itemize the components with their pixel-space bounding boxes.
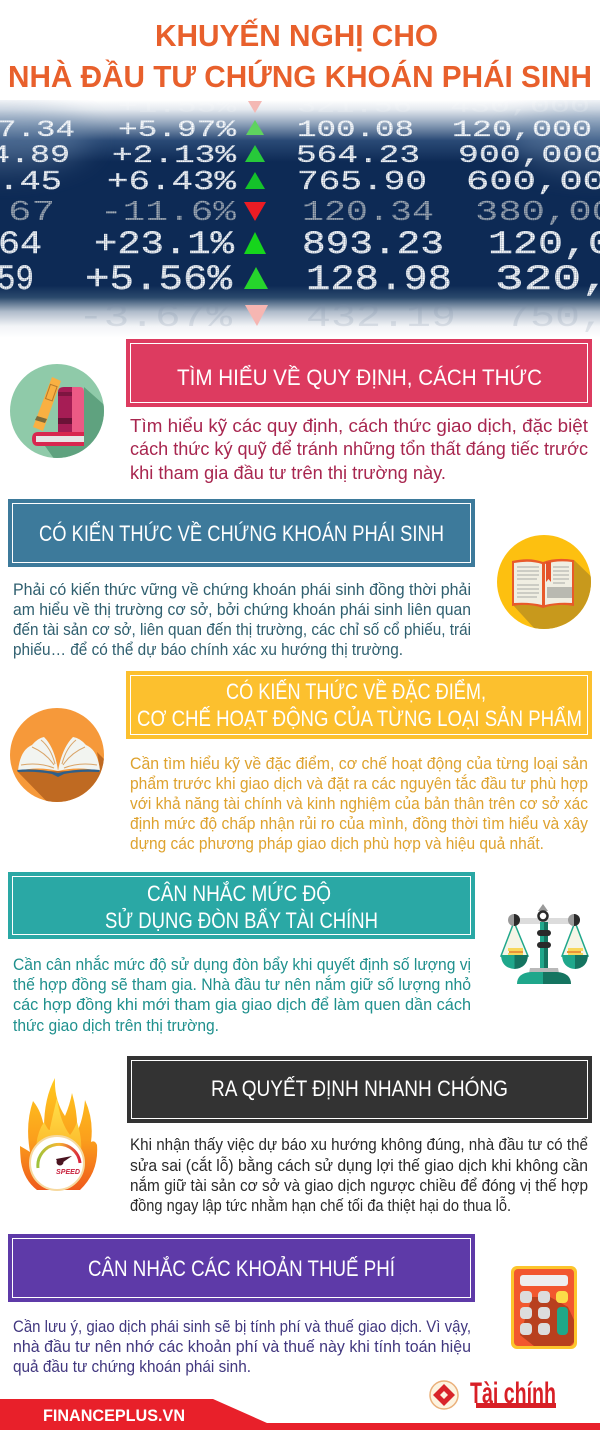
section 5: fast decisions: [20, 1056, 592, 1215]
heading: regulations: TÌM HIỂU VỀ QUY ĐỊNH, CÁCH THỨC: [177, 365, 542, 390]
stock ticker board photo: -3.67%: [78, 299, 233, 336]
body text: financial leverage: thức giao dịch trên thị trường.: [13, 1017, 219, 1035]
title: [8, 18, 592, 94]
heading: regulations: [126, 339, 592, 407]
heading: taxes and fees: [8, 1234, 475, 1302]
logo: Tài chính: Tài chính: [470, 1377, 556, 1410]
section 4: financial leverage: [8, 872, 588, 1035]
footer bar: [0, 1399, 600, 1430]
body text: regulations: Tìm hiểu kỹ các quy định, cách thức giao dịch, đặc biệt: [130, 416, 588, 436]
heading: derivatives knowledge: [8, 499, 475, 567]
stock ticker board photo: 100.08: [297, 117, 414, 143]
stock ticker board photo: +23.1%: [94, 226, 235, 263]
body text: derivatives knowledge: đến tài sản cơ sở, liên quan đến thị trường, các chỉ số cổ phiếu, trái: [13, 621, 471, 639]
icon: stack of books: [10, 364, 104, 458]
body text: product features: định mức độ chấp nhận rủi ro của mình, đồng thời tìm hiểu và xây: [130, 815, 589, 833]
stock ticker board photo: 893.23: [302, 226, 444, 263]
stock ticker board photo: 900,000: [458, 141, 600, 170]
heading: derivatives knowledge: CÓ KIẾN THỨC VỀ CHỨNG KHOÁN PHÁI SINH: [39, 521, 444, 546]
stock ticker board photo: 320,: [495, 260, 600, 300]
stock ticker board photo: +1.55%: [118, 96, 238, 119]
icon: flaming speedometer: SPEED: [56, 1169, 80, 1176]
stock ticker board photo: 380,00: [475, 196, 600, 229]
logo: Tài chính: [430, 1377, 556, 1410]
body text: regulations: [130, 416, 588, 483]
heading: fast decisions: RA QUYẾT ĐỊNH NHANH CHÓNG: [211, 1076, 508, 1101]
body text: fast decisions: [130, 1136, 588, 1215]
stock ticker board photo: 765.90: [297, 168, 427, 198]
body text: product features: Cần tìm hiểu kỹ về đặc điểm, cơ chế hoạt động của từng loại sản: [130, 755, 588, 773]
body text: derivatives knowledge: Phải có kiến thức vững về chứng khoán phái sinh đồng thời phải: [13, 581, 471, 599]
stock ticker board photo: 750,: [505, 299, 600, 336]
section 1: regulations: [10, 339, 592, 483]
heading: financial leverage: CÂN NHẮC MỨC ĐỘ: [147, 881, 331, 906]
body text: taxes and fees: Cần lưu ý, giao dịch phái sinh sẽ bị tính phí và thuế giao dịch. Vì vậy,: [13, 1318, 471, 1336]
body text: fast decisions: đồng ngay lập tức nhằm hạn chế tối đa thiệt hại do thua lỗ.: [130, 1196, 511, 1215]
icon: flaming speedometer: [20, 1078, 97, 1190]
body text: derivatives knowledge: phiếu… để có thể dự báo chính xác xu hướng thị trường.: [13, 641, 403, 659]
body text: regulations: cách thức ký quỹ để tránh những tổn thất đáng tiếc trước: [130, 439, 588, 459]
stock ticker board photo: [0, 96, 600, 338]
heading: product features: [126, 671, 592, 739]
stock ticker board photo: 432.19: [306, 299, 456, 336]
body text: taxes and fees: [13, 1318, 471, 1376]
section 2: derivatives knowledge: [8, 499, 600, 659]
body text: regulations: khi tham gia đầu tư trên thị trường này.: [130, 463, 446, 483]
stock ticker board photo: +2.13%: [112, 141, 237, 170]
stock ticker board photo: +5.97%: [118, 117, 236, 143]
body text: fast decisions: sửa sai (cắt lỗ) bằng cách sử dụng lợi thế giao dịch khi không cần: [130, 1156, 588, 1175]
body text: financial leverage: [13, 955, 471, 1035]
icon: fanned book on orange circle: [10, 708, 104, 802]
section 6: taxes and fees: [8, 1234, 577, 1376]
stock ticker board photo: 564.23: [296, 141, 420, 170]
body text: derivatives knowledge: [13, 581, 471, 659]
stock ticker board photo: 120,0: [488, 226, 600, 263]
heading: taxes and fees: CÂN NHẮC CÁC KHOẢN THUẾ PHÍ: [88, 1256, 396, 1281]
footer bar: FINANCEPLUS.VN: [43, 1406, 185, 1425]
heading: fast decisions: [127, 1056, 592, 1123]
title: KHUYẾN NGHỊ CHO: [155, 18, 438, 53]
stock ticker board photo: -11.6%: [100, 196, 237, 229]
stock ticker board photo: 321.56: [297, 96, 412, 119]
heading: financial leverage: [8, 872, 475, 939]
stock ticker board photo: 120,000: [452, 117, 592, 143]
body text: product features: [130, 755, 589, 853]
stock ticker board photo: +5.56%: [85, 260, 233, 300]
heading: financial leverage: SỬ DỤNG ĐÒN BẨY TÀI CHÍNH: [105, 908, 378, 933]
body text: financial leverage: Cần cân nhắc mức độ sử dụng đòn bẩy khi quyết định số lượng vị: [13, 955, 471, 974]
icon: calculator: [511, 1266, 577, 1349]
title: NHÀ ĐẦU TƯ CHỨNG KHOÁN PHÁI SINH: [8, 58, 592, 94]
stock ticker board photo: +6.43%: [107, 168, 237, 198]
body text: product features: dựng các phương pháp giao dịch phù hợp và hiệu quả nhất.: [130, 835, 544, 853]
icon: open book on yellow circle: [497, 535, 591, 629]
body text: taxes and fees: nhà đầu tư nên nhớ các khoản phí và thuế này khi tính toán hiệu: [13, 1338, 471, 1356]
body text: taxes and fees: quả đầu tư chứng khoán phái sinh.: [13, 1358, 251, 1376]
body text: financial leverage: các hợp đồng khi mới tham gia giao dịch để làm quen dần cách: [13, 996, 471, 1014]
heading: product features: CÓ KIẾN THỨC VỀ ĐẶC ĐIỂM,: [226, 679, 486, 704]
icon: balance scales: [501, 904, 588, 984]
stock ticker board photo: 128.98: [306, 260, 452, 300]
stock ticker board photo: 430,000: [450, 96, 590, 119]
stock ticker board photo: 120.34: [302, 196, 434, 229]
body text: derivatives knowledge: am hiểu về thị trường cơ sở, bởi chứng khoán phái sinh liên quan: [13, 601, 471, 619]
stock ticker board photo: 67: [8, 196, 55, 229]
stock ticker board photo: 600,00: [466, 168, 600, 198]
body text: financial leverage: thế hợp đồng sẽ tham gia. Nhà đầu tư nên nắm giữ số lượng nhỏ: [13, 975, 471, 994]
section 3: product features: [10, 671, 592, 853]
